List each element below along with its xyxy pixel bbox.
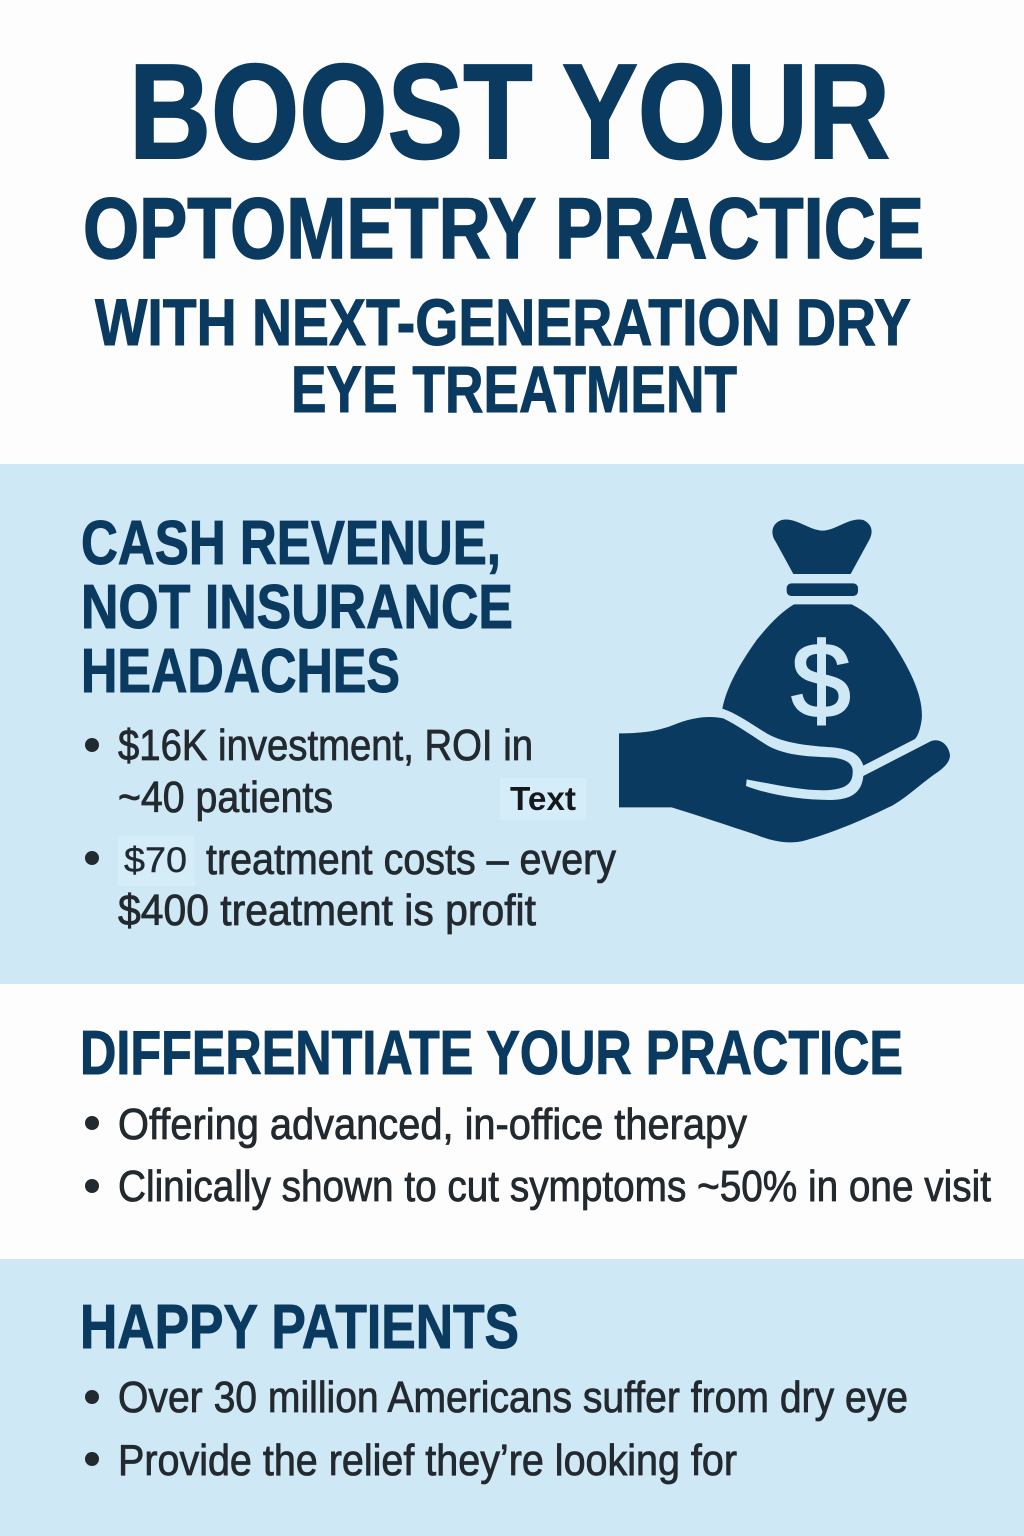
heading: cash revenue (81, 509, 513, 706)
heading: cash revenue: HEADACHES (81, 637, 400, 706)
title: EYE TREATMENT (291, 352, 737, 426)
bullet: in-office therapy: Offering advanced, in-office therapy (118, 1100, 747, 1149)
bullet: treatment costs: $400 treatment is profit (118, 886, 536, 935)
panel: happy patients (0, 1259, 1024, 1536)
panel: differentiate your practice (80, 1019, 991, 1211)
stray text label (500, 778, 586, 820)
panel: cash revenue (0, 464, 1024, 984)
bullet: provide relief: Provide the relief they’re looking for (118, 1436, 737, 1485)
bullet: treatment costs: treatment costs – every (206, 835, 616, 884)
heading: cash revenue: CASH REVENUE, (81, 509, 501, 578)
heading: cash revenue: NOT INSURANCE (81, 573, 513, 642)
heading: happy patients: HAPPY PATIENTS (80, 1293, 519, 1362)
bullet: treatment costs: $70 (124, 841, 187, 880)
bullet: investment and ROI: ~40 patients (118, 773, 333, 822)
title: BOOST YOUR (129, 36, 890, 187)
title (83, 36, 924, 426)
bullet: investment and ROI: $16K investment, ROI in (118, 721, 533, 770)
icon: hand holding money bag: $ (792, 622, 850, 740)
bullet: treatment costs (85, 835, 616, 935)
icon: hand holding money bag (619, 519, 950, 842)
bullet: investment and ROI (85, 721, 533, 822)
bullet: dry eye prevalence: Over 30 million Americans suffer from dry eye (118, 1373, 908, 1422)
stray text label: Text (510, 780, 576, 817)
